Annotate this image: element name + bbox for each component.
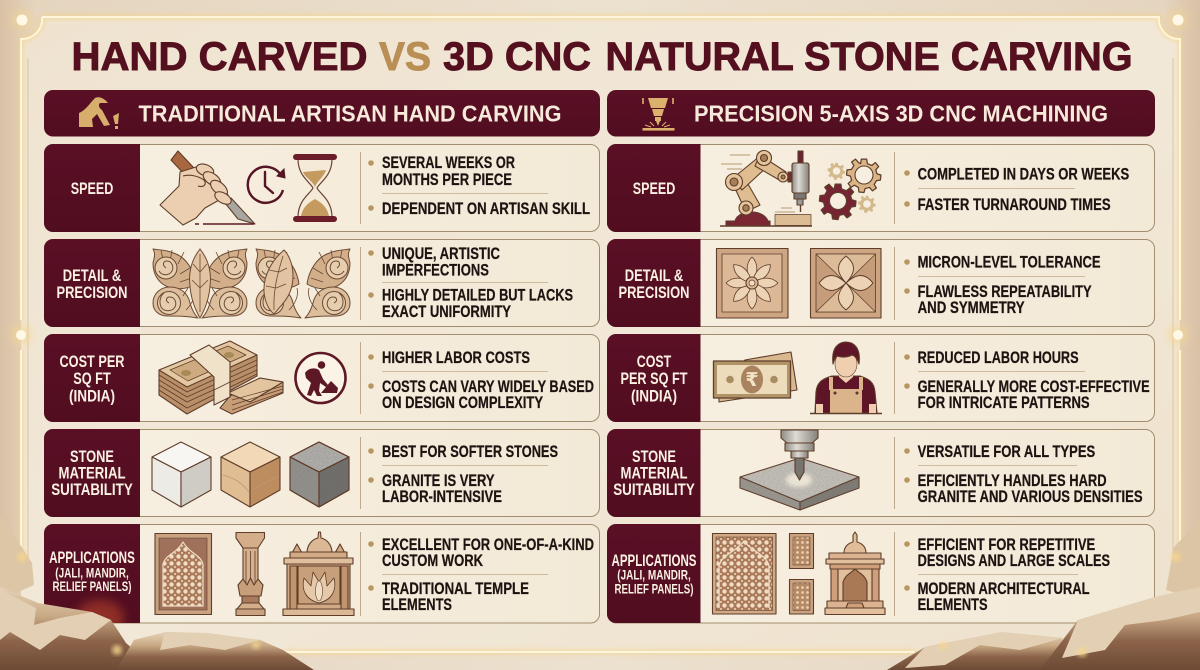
- icon: hourglass: [293, 154, 337, 222]
- bullets: right stone: VERSATILE FOR ALL TYPES: [918, 442, 1095, 461]
- bullets: right applications: ELEMENTS: [918, 595, 988, 614]
- bullets: right detail: MICRON-LEVEL TOLERANCE: [918, 253, 1101, 272]
- icon: clock: [248, 167, 285, 203]
- label: applications: (JALI, MANDIR,: [617, 567, 691, 583]
- bullets: right detail: [904, 253, 1101, 317]
- label: applications: RELIEF PANELS): [52, 578, 132, 594]
- title: 3D CNC: [443, 35, 591, 79]
- title: HAND CARVED: [72, 35, 368, 79]
- icon: artisan hand: [79, 97, 119, 129]
- title: NATURAL STONE CARVING: [606, 35, 1132, 79]
- bullets: left speed: [368, 153, 590, 218]
- icon: CNC jali: [712, 534, 776, 614]
- label: cost per sq ft: (INDIA): [631, 388, 677, 406]
- panel: right stone material: [607, 429, 1154, 517]
- title: VS: [379, 35, 431, 79]
- bullets: right applications: DESIGNS AND LARGE SCALES: [918, 551, 1110, 570]
- label: applications: APPLICATIONS: [49, 549, 135, 567]
- label: cost per sq ft: [607, 334, 700, 422]
- bullets: left cost: ON DESIGN COMPLEXITY: [382, 393, 543, 412]
- rocks: bottom right: [887, 520, 1200, 670]
- panel: left applications: [44, 524, 600, 624]
- bullets: left cost: [368, 348, 594, 412]
- panel: right detail and precision: [607, 239, 1154, 327]
- bullets: right stone: EFFICIENTLY HANDLES HARD: [918, 471, 1107, 490]
- bullets: right detail: FLAWLESS REPEATABILITY: [918, 282, 1092, 301]
- label: stone material suitability: STONE: [70, 448, 114, 466]
- left header: traditional artisan hand carving: [44, 90, 600, 136]
- label: speed: SPEED: [633, 180, 675, 198]
- icon: hand with chisel: [160, 151, 255, 225]
- bullets: left detail: UNIQUE, ARTISTIC: [382, 244, 500, 263]
- panel: right cost: [607, 334, 1154, 422]
- label: applications: [607, 524, 700, 623]
- glow dots: [12, 11, 1187, 344]
- label: applications: APPLICATIONS: [612, 552, 696, 570]
- label: detail and precision: [607, 239, 700, 327]
- icon: jali screen: [155, 534, 212, 614]
- icon: carved pillar: [236, 532, 265, 616]
- bullets: left stone: GRANITE IS VERY: [382, 471, 495, 490]
- icon: rupee banknote: ₹: [745, 369, 759, 391]
- label: detail and precision: DETAIL &: [63, 267, 121, 285]
- bullets: left detail: [368, 244, 573, 321]
- icon: hand carved acanthus left: [153, 249, 247, 318]
- bullets: right cost: REDUCED LABOR HOURS: [918, 348, 1079, 367]
- right header: precision 5-axis 3D CNC machining: [607, 90, 1155, 136]
- bullets: left applications: EXCELLENT FOR ONE-OF-A-KIND: [382, 535, 594, 554]
- label: cost per sq ft: PER SQ FT: [620, 370, 688, 388]
- bullets: left applications: CUSTOM WORK: [382, 551, 484, 570]
- bullets: right applications: [904, 535, 1110, 614]
- bullets: right cost: FOR INTRICATE PATTERNS: [918, 393, 1090, 412]
- bullets: left detail: HIGHLY DETAILED BUT LACKS: [382, 286, 573, 305]
- bullets: left speed: DEPENDENT ON ARTISAN SKILL: [382, 199, 590, 218]
- icon: labor sign: [296, 353, 346, 403]
- icon: marble cube: [152, 442, 211, 507]
- label: speed: SPEED: [71, 180, 113, 198]
- bullets: left detail: EXACT UNIFORMITY: [382, 302, 512, 321]
- bullets: right speed: [904, 164, 1129, 214]
- label: speed: [607, 144, 700, 232]
- bullets: right applications: MODERN ARCHITECTURAL: [918, 579, 1090, 598]
- label: stone material suitability: MATERIAL: [58, 465, 126, 483]
- label: applications: [44, 524, 140, 623]
- bullets: right cost: [904, 348, 1150, 412]
- bullets: right applications: EFFICIENT FOR REPETITIVE: [918, 535, 1095, 554]
- label: stone material suitability: MATERIAL: [620, 465, 688, 483]
- panel: right speed: [607, 144, 1154, 232]
- label: detail and precision: DETAIL &: [625, 267, 683, 285]
- icon: hand carved acanthus right: [256, 249, 350, 318]
- label: applications: (JALI, MANDIR,: [55, 565, 129, 581]
- label: stone material suitability: STONE: [632, 448, 676, 466]
- bullets: left stone: [368, 442, 558, 506]
- label: cost per sq ft: COST PER: [60, 353, 125, 371]
- panel: left cost: [44, 334, 600, 422]
- icon: small panels: [790, 534, 814, 614]
- panel: left stone material: [44, 429, 600, 517]
- right header: precision 5-axis 3D CNC machining: PRECISION 5-AXIS 3D CNC MACHINING: [694, 101, 1108, 127]
- label: cost per sq ft: [44, 334, 140, 422]
- bullets: right detail: AND SYMMETRY: [918, 298, 1025, 317]
- bullets: right speed: FASTER TURNAROUND TIMES: [918, 195, 1111, 214]
- bullets: left cost: COSTS CAN VARY WIDELY BASED: [382, 377, 594, 396]
- panel: left detail and precision: [44, 239, 600, 327]
- left header: traditional artisan hand carving: TRADITIONAL ARTISAN HAND CARVING: [138, 101, 562, 127]
- label: stone material suitability: [607, 429, 700, 517]
- icon: sandstone cube: [221, 442, 280, 507]
- icon: gears: [819, 159, 881, 220]
- panel: right applications: [607, 524, 1154, 623]
- icon: worker: [810, 342, 882, 414]
- label: speed: [44, 144, 140, 232]
- icon: granite cube: [288, 440, 351, 509]
- label: cost per sq ft: COST: [637, 353, 671, 371]
- icon: carved temple shrine: [283, 532, 354, 616]
- panel: left speed: [44, 144, 600, 232]
- bullets: right speed: COMPLETED IN DAYS OR WEEKS: [918, 164, 1129, 183]
- rocks: bottom left: [0, 516, 314, 670]
- label: stone material suitability: SUITABILITY: [613, 481, 695, 499]
- bullets: left speed: MONTHS PER PIECE: [382, 170, 512, 189]
- icon: rupee note stacks: [159, 341, 283, 414]
- icon: CNC spindle: [642, 98, 674, 131]
- icon: rupee banknote: [714, 352, 797, 402]
- title: [72, 35, 1132, 79]
- label: cost per sq ft: (INDIA): [69, 388, 115, 406]
- label: stone material suitability: [44, 429, 140, 517]
- label: detail and precision: [44, 239, 140, 327]
- bullets: left cost: HIGHER LABOR COSTS: [382, 348, 530, 367]
- bullets: left stone: LABOR-INTENSIVE: [382, 487, 502, 506]
- icon: CNC star tile: [810, 248, 881, 318]
- label: detail and precision: PRECISION: [56, 284, 128, 302]
- bullets: right stone: [904, 442, 1143, 506]
- bullets: left detail: IMPERFECTIONS: [382, 261, 489, 280]
- bullets: left applications: ELEMENTS: [382, 595, 452, 614]
- icon: CNC rosette tile: [716, 248, 788, 318]
- label: cost per sq ft: SQ FT: [73, 370, 111, 388]
- icon: CNC mandir: [825, 532, 885, 614]
- bullets: left speed: SEVERAL WEEKS OR: [382, 153, 515, 172]
- icon: CNC drill on granite slab: [738, 430, 861, 512]
- label: detail and precision: PRECISION: [618, 284, 690, 302]
- icon: robot arm: [720, 150, 812, 226]
- bullets: left stone: BEST FOR SOFTER STONES: [382, 442, 558, 461]
- label: stone material suitability: SUITABILITY: [51, 481, 133, 499]
- bullets: left applications: TRADITIONAL TEMPLE: [382, 579, 529, 598]
- label: applications: RELIEF PANELS): [614, 581, 694, 597]
- bullets: left applications: [368, 535, 594, 614]
